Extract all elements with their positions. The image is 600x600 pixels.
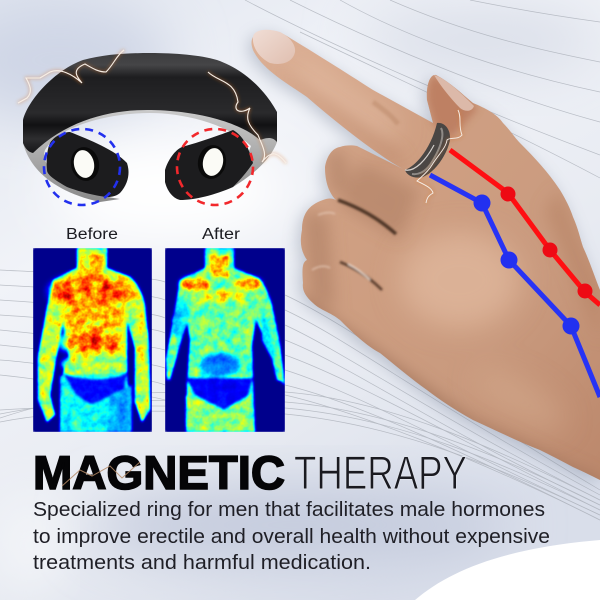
hand highlights — [308, 74, 552, 422]
blue dashed circle — [44, 129, 120, 205]
title: THERAPY: THERAPY — [294, 446, 467, 499]
thermal image: after — [165, 248, 285, 432]
right pad — [165, 130, 253, 200]
ring product — [18, 50, 286, 205]
ring on finger — [405, 123, 450, 178]
description text: to improve erectile and overall health without expensive — [33, 525, 550, 548]
white corner curve — [415, 540, 600, 600]
hand shape — [252, 34, 600, 480]
fingernail: bent finger — [434, 75, 474, 111]
hand with ring — [240, 20, 600, 500]
red nerve line — [450, 150, 600, 305]
fingernail: index — [253, 30, 295, 64]
red dashed circle — [177, 129, 253, 205]
magnet right — [195, 142, 229, 182]
description text — [33, 498, 550, 574]
description text: treatments and harmful medication. — [33, 551, 371, 574]
ring band — [23, 53, 277, 153]
title: MAGNETIC: MAGNETIC — [33, 446, 285, 499]
silver inner rim — [23, 90, 277, 202]
magnet left — [68, 144, 102, 184]
sparks on finger — [417, 110, 462, 203]
title spark — [62, 462, 140, 486]
hand shadow — [248, 34, 597, 484]
title — [33, 446, 467, 499]
thermal image: before — [33, 248, 152, 432]
left pad — [47, 132, 129, 197]
finger creases — [312, 102, 398, 290]
hand shading — [298, 84, 600, 480]
bent finger tint — [427, 75, 478, 140]
label: After: After — [202, 226, 240, 243]
blue nerve line — [430, 175, 600, 397]
sparks on ring — [18, 50, 286, 163]
description text: Specialized ring for men that facilitates male hormones — [33, 498, 545, 521]
label: Before: Before — [66, 226, 118, 243]
